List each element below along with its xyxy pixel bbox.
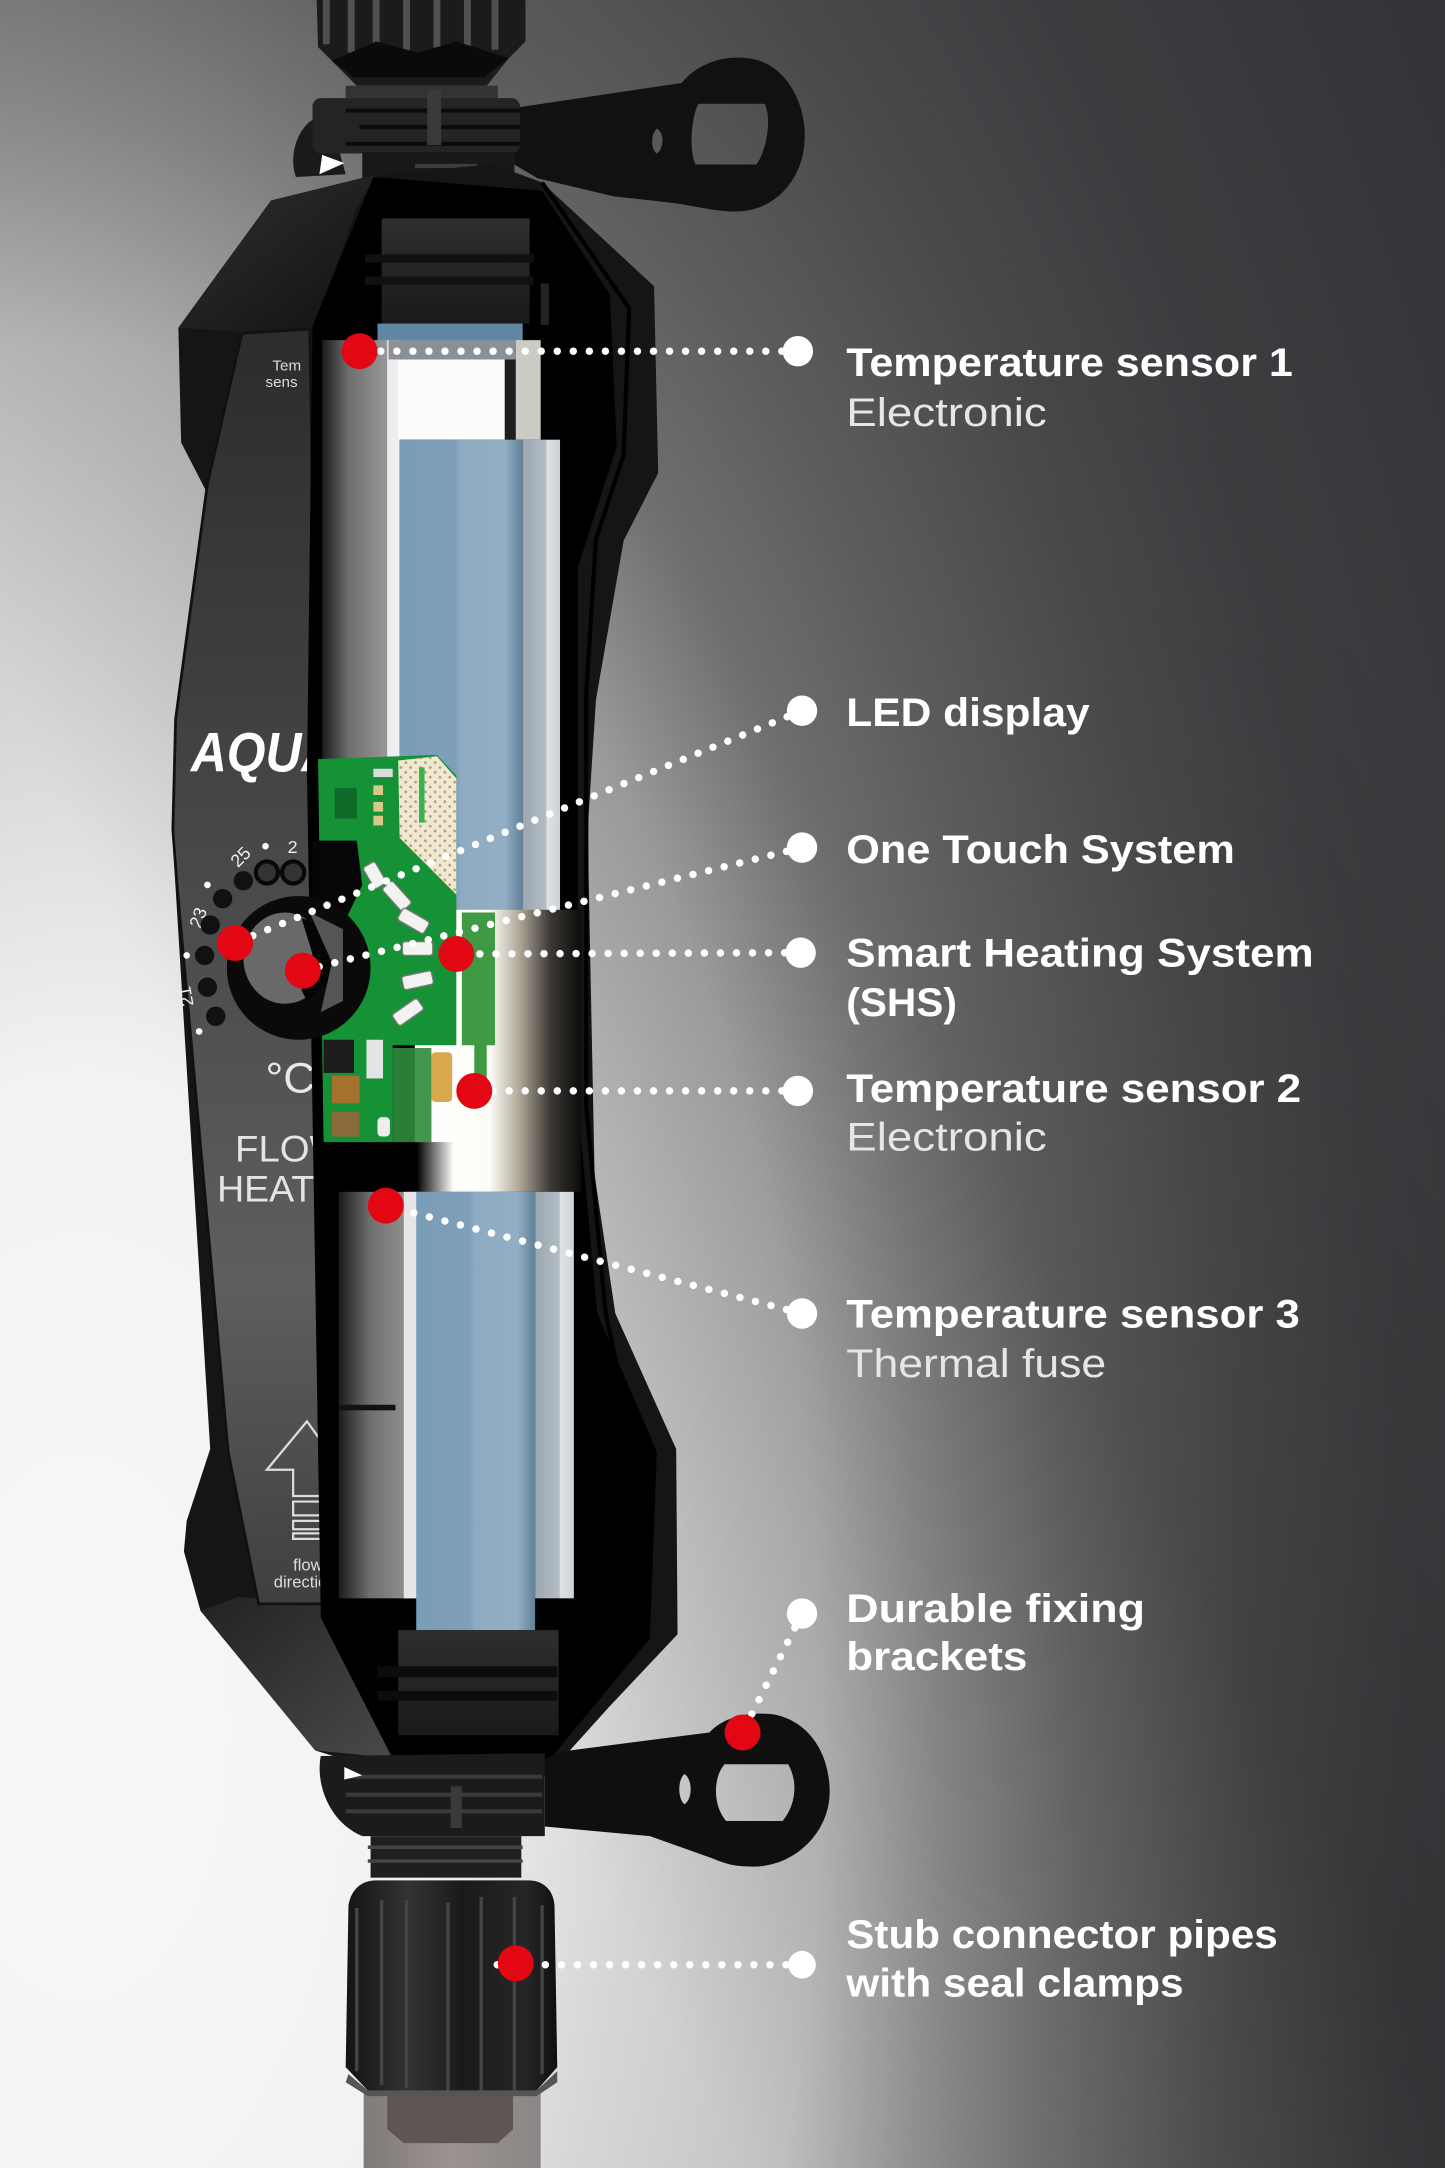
- panel lettering: 21: [174, 985, 198, 1008]
- callout: durable fixing brackets: brackets: [846, 1635, 1027, 1679]
- callout: Smart Heating System: [438, 931, 1314, 1025]
- callout: LED display: [217, 691, 1090, 961]
- callout: stub connector pipes: [488, 1913, 1278, 2006]
- product: flow heater cutaway: [173, 0, 830, 2168]
- callout: One Touch System: One Touch System: [846, 828, 1235, 872]
- callout: Smart Heating System: Smart Heating System: [846, 931, 1314, 975]
- lower tube: [339, 1192, 574, 1630]
- brand name: AQUA: [189, 722, 337, 784]
- callout: One Touch System: [285, 828, 1235, 989]
- upper tube: [322, 324, 560, 917]
- interior cavity: [307, 177, 657, 1759]
- callout: durable fixing brackets: [725, 1587, 1145, 1750]
- top clamp ring: [293, 90, 520, 196]
- top facet: [178, 174, 377, 332]
- top connector nut: [317, 0, 525, 100]
- callout: temperature sensor 3: Temperature sensor 3: [846, 1292, 1300, 1336]
- dial scale numbers: 25: [227, 843, 255, 871]
- panel lettering: direction: [274, 1572, 336, 1591]
- panel lettering: sens: [265, 374, 298, 391]
- callout: temperature sensor 1: Temperature sensor 1: [846, 341, 1293, 385]
- sensor note: Tem: [272, 358, 301, 375]
- callout: temperature sensor 1: Electronic: [846, 391, 1047, 435]
- callout: Smart Heating System: (SHS): [846, 981, 957, 1025]
- callout: LED display: LED display: [846, 691, 1090, 735]
- flow direction: flow: [293, 1556, 324, 1575]
- upper pipe cap: [365, 218, 549, 325]
- flow heater label: FLOW: [235, 1127, 346, 1169]
- callout: temperature sensor 3: [368, 1188, 1300, 1386]
- callout: temperature sensor 1: [342, 333, 1293, 435]
- bottom fixing bracket: [545, 1714, 830, 1867]
- panel lettering: HEATER: [217, 1168, 366, 1210]
- temperature unit: °C: [265, 1054, 315, 1102]
- shell inner contour: [542, 183, 639, 1745]
- bottom clamp ring: [320, 1753, 545, 1878]
- callout: temperature sensor 2: [456, 1067, 1301, 1159]
- circuit board: [318, 755, 495, 1142]
- body outer shell: [173, 165, 678, 1777]
- callout: stub connector pipes: with seal clamps: [845, 1962, 1184, 2006]
- callout: durable fixing brackets: Durable fixing: [846, 1587, 1145, 1631]
- dial scale marks: [183, 843, 304, 1035]
- control knob: [227, 841, 371, 1040]
- arrow icon: [267, 1421, 339, 1539]
- callout: temperature sensor 2: Electronic: [846, 1115, 1047, 1159]
- bottom connector nut: [346, 1880, 557, 2168]
- callout: temperature sensor 3: Thermal fuse: [846, 1342, 1106, 1386]
- panel lettering: 23: [185, 905, 211, 931]
- lower pipe cap: [377, 1630, 559, 1735]
- LED components: [363, 861, 434, 1026]
- front control panel: [173, 329, 332, 1604]
- panel lettering: [174, 358, 366, 1591]
- panel lettering: 2: [288, 837, 298, 857]
- top fixing bracket: [498, 57, 805, 212]
- callout: stub connector pipes: Stub connector pipes: [846, 1913, 1278, 1957]
- bottom facet: [201, 1597, 401, 1759]
- callout: temperature sensor 2: Temperature sensor 2: [846, 1067, 1301, 1111]
- metallic mid sleeve: [322, 910, 581, 1192]
